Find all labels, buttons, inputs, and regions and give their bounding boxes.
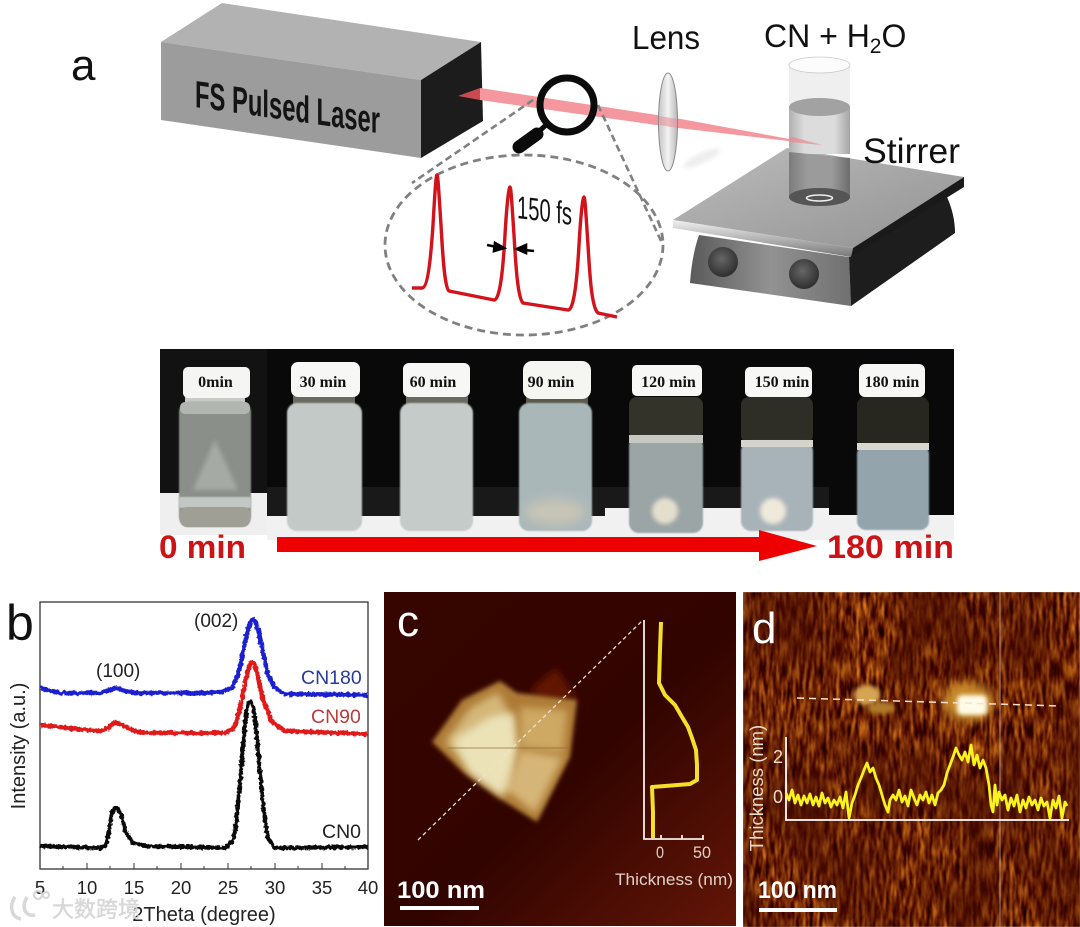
panel a: laser setup schematic — [71, 3, 964, 335]
profile axes — [786, 737, 1069, 820]
panel label a: a — [71, 41, 96, 90]
profile axis labels — [746, 725, 783, 851]
panel label c: c — [397, 597, 419, 646]
cylinder with liquid — [789, 57, 850, 206]
profile curve — [786, 745, 1067, 818]
panel b: XRD chart — [6, 595, 378, 926]
peak labels and series labels: CN180 — [301, 667, 362, 689]
pulse train inset — [385, 155, 663, 335]
x tick labels: 25 — [218, 877, 238, 898]
panel c: AFM image with flake — [384, 592, 736, 926]
panel label d: d — [752, 604, 776, 653]
profile axis labels: 0 — [773, 787, 783, 807]
vial 60 min — [400, 363, 473, 531]
magnetic stirrer — [673, 148, 964, 306]
flake — [432, 681, 577, 822]
profile axis labels: 0 — [656, 843, 664, 862]
time start label: 0 min — [159, 529, 246, 565]
vial 30 min — [287, 362, 362, 531]
zoom-in dashed guide lines — [412, 100, 662, 243]
curve CN90 — [40, 662, 368, 734]
time arrow — [277, 530, 817, 561]
vial 120 min: 120 min — [641, 374, 696, 391]
curve CN0 — [40, 702, 368, 848]
laser beam — [458, 88, 822, 145]
width arrows — [487, 243, 534, 253]
watermark: 大数跨境 — [52, 892, 140, 924]
AFM background — [384, 592, 736, 926]
sample label: 2 — [870, 35, 881, 58]
watermark — [12, 891, 140, 924]
red pulse curve — [412, 175, 617, 317]
particles — [854, 682, 994, 722]
vial 90 min: 90 min — [528, 374, 574, 391]
profile axis labels: 50 — [693, 843, 711, 862]
thickness profile axes — [644, 620, 704, 839]
faint rear flake — [530, 668, 578, 700]
photo background — [160, 349, 954, 540]
peak labels and series labels — [96, 611, 362, 843]
x ticks — [40, 863, 368, 869]
vial 0 min: 0min — [198, 374, 233, 391]
x axis title: 2Theta (degree) — [132, 904, 276, 926]
vial 0 min — [179, 367, 251, 527]
panel: vial photo series — [159, 349, 954, 565]
line-scan path — [418, 620, 643, 840]
line-scan path — [797, 698, 1061, 706]
panel label b: b — [6, 595, 34, 651]
x tick labels: 5 — [35, 877, 45, 898]
profile axis labels — [615, 843, 733, 889]
lens label: Lens — [632, 19, 700, 56]
x tick labels: 30 — [265, 877, 285, 898]
x tick labels: 10 — [77, 877, 97, 898]
peak labels and series labels: CN90 — [311, 706, 361, 728]
profile axis labels: Thickness (nm) — [746, 725, 767, 851]
scale bar c: 100 nm — [397, 877, 485, 904]
laser source box — [161, 3, 483, 158]
scale bar d: 100 nm — [758, 877, 837, 904]
x tick labels: 40 — [358, 877, 378, 898]
x tick labels: 15 — [124, 877, 144, 898]
pulse width label: 150 fs — [517, 189, 572, 232]
laser label: FS Pulsed Laser — [195, 73, 380, 142]
curve CN180 — [40, 620, 368, 695]
sample label: CN + H — [764, 18, 870, 54]
panel d: AFM noise image with profile — [743, 592, 1080, 927]
vial 150 min — [741, 367, 813, 531]
profile axis labels: Thickness (nm) — [615, 870, 733, 889]
time end label: 180 min — [827, 529, 954, 565]
icon: magnifying glass — [519, 78, 594, 147]
AFM noisy background — [743, 592, 1080, 927]
stirrer label: Stirrer — [863, 132, 960, 171]
vial 180 min — [857, 364, 929, 530]
x tick labels: 35 — [312, 877, 332, 898]
profile axis labels: 2 — [773, 747, 783, 767]
axes frame — [40, 602, 368, 869]
vial 150 min: 150 min — [755, 374, 809, 391]
lens — [658, 73, 722, 171]
x tick labels: 20 — [171, 877, 191, 898]
sample label: O — [881, 18, 906, 54]
peak labels and series labels: CN0 — [322, 821, 361, 843]
vial 90 min — [519, 361, 592, 531]
thickness profile curve — [652, 622, 697, 838]
vial 120 min — [629, 365, 703, 533]
x tick labels — [35, 877, 378, 898]
vial 180 min: 180 min — [865, 374, 919, 391]
vial 30 min: 30 min — [300, 374, 346, 391]
y axis title: Intensity (a.u.) — [8, 683, 30, 809]
peak labels and series labels: (100) — [96, 661, 140, 682]
peak labels and series labels: (002) — [194, 611, 238, 632]
vial 60 min: 60 min — [410, 374, 456, 391]
